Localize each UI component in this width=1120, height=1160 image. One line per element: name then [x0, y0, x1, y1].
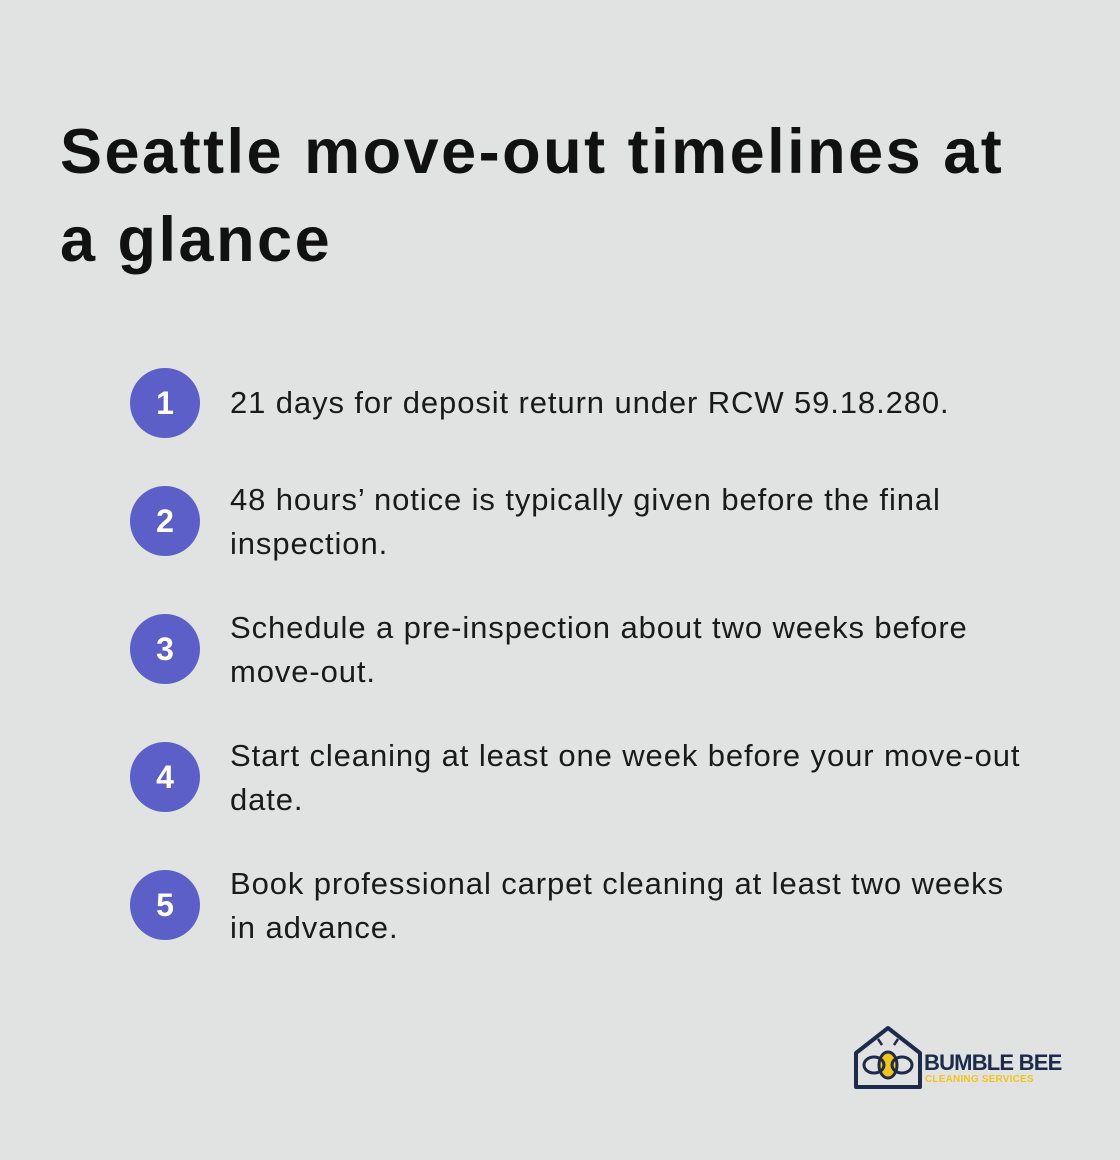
number 2: [130, 486, 200, 556]
text 5: Book professional carpet cleaning at least two weeks: [230, 866, 1004, 901]
title: Seattle move-out timelines at: [60, 117, 1004, 187]
item 3: [130, 610, 968, 689]
number 3: 3: [156, 631, 174, 667]
number 4: 4: [156, 759, 174, 795]
number 3: [130, 614, 200, 684]
number 4: [130, 742, 200, 812]
text 5: [230, 866, 1004, 945]
text 4: [230, 738, 1020, 817]
title: [60, 117, 1004, 275]
number 5: 5: [156, 887, 174, 923]
text 1: 21 days for deposit return under RCW 59.18.280.: [230, 385, 950, 420]
text 4: date.: [230, 782, 303, 817]
text 4: Start cleaning at least one week before your move-out: [230, 738, 1020, 773]
text 2: inspection.: [230, 526, 388, 561]
number 1: 1: [156, 385, 174, 421]
text 3: Schedule a pre-inspection about two weeks before: [230, 610, 968, 645]
item 2: [130, 482, 941, 561]
text 2: 48 hours’ notice is typically given before the final: [230, 482, 941, 517]
text 3: [230, 610, 968, 689]
icon: bee house: [854, 1026, 922, 1089]
item 1: [130, 368, 950, 438]
number 1: [130, 368, 200, 438]
item 5: [130, 866, 1004, 945]
logo: [854, 1026, 1062, 1089]
text 2: [230, 482, 941, 561]
number 2: 2: [156, 503, 174, 539]
number 5: [130, 870, 200, 940]
logo: CLEANING SERVICES: [925, 1074, 1034, 1085]
title: a glance: [60, 205, 332, 275]
text 3: move-out.: [230, 654, 376, 689]
item 4: [130, 738, 1020, 817]
logo text: BUMBLE BEE: [924, 1050, 1061, 1075]
text 5: in advance.: [230, 910, 398, 945]
